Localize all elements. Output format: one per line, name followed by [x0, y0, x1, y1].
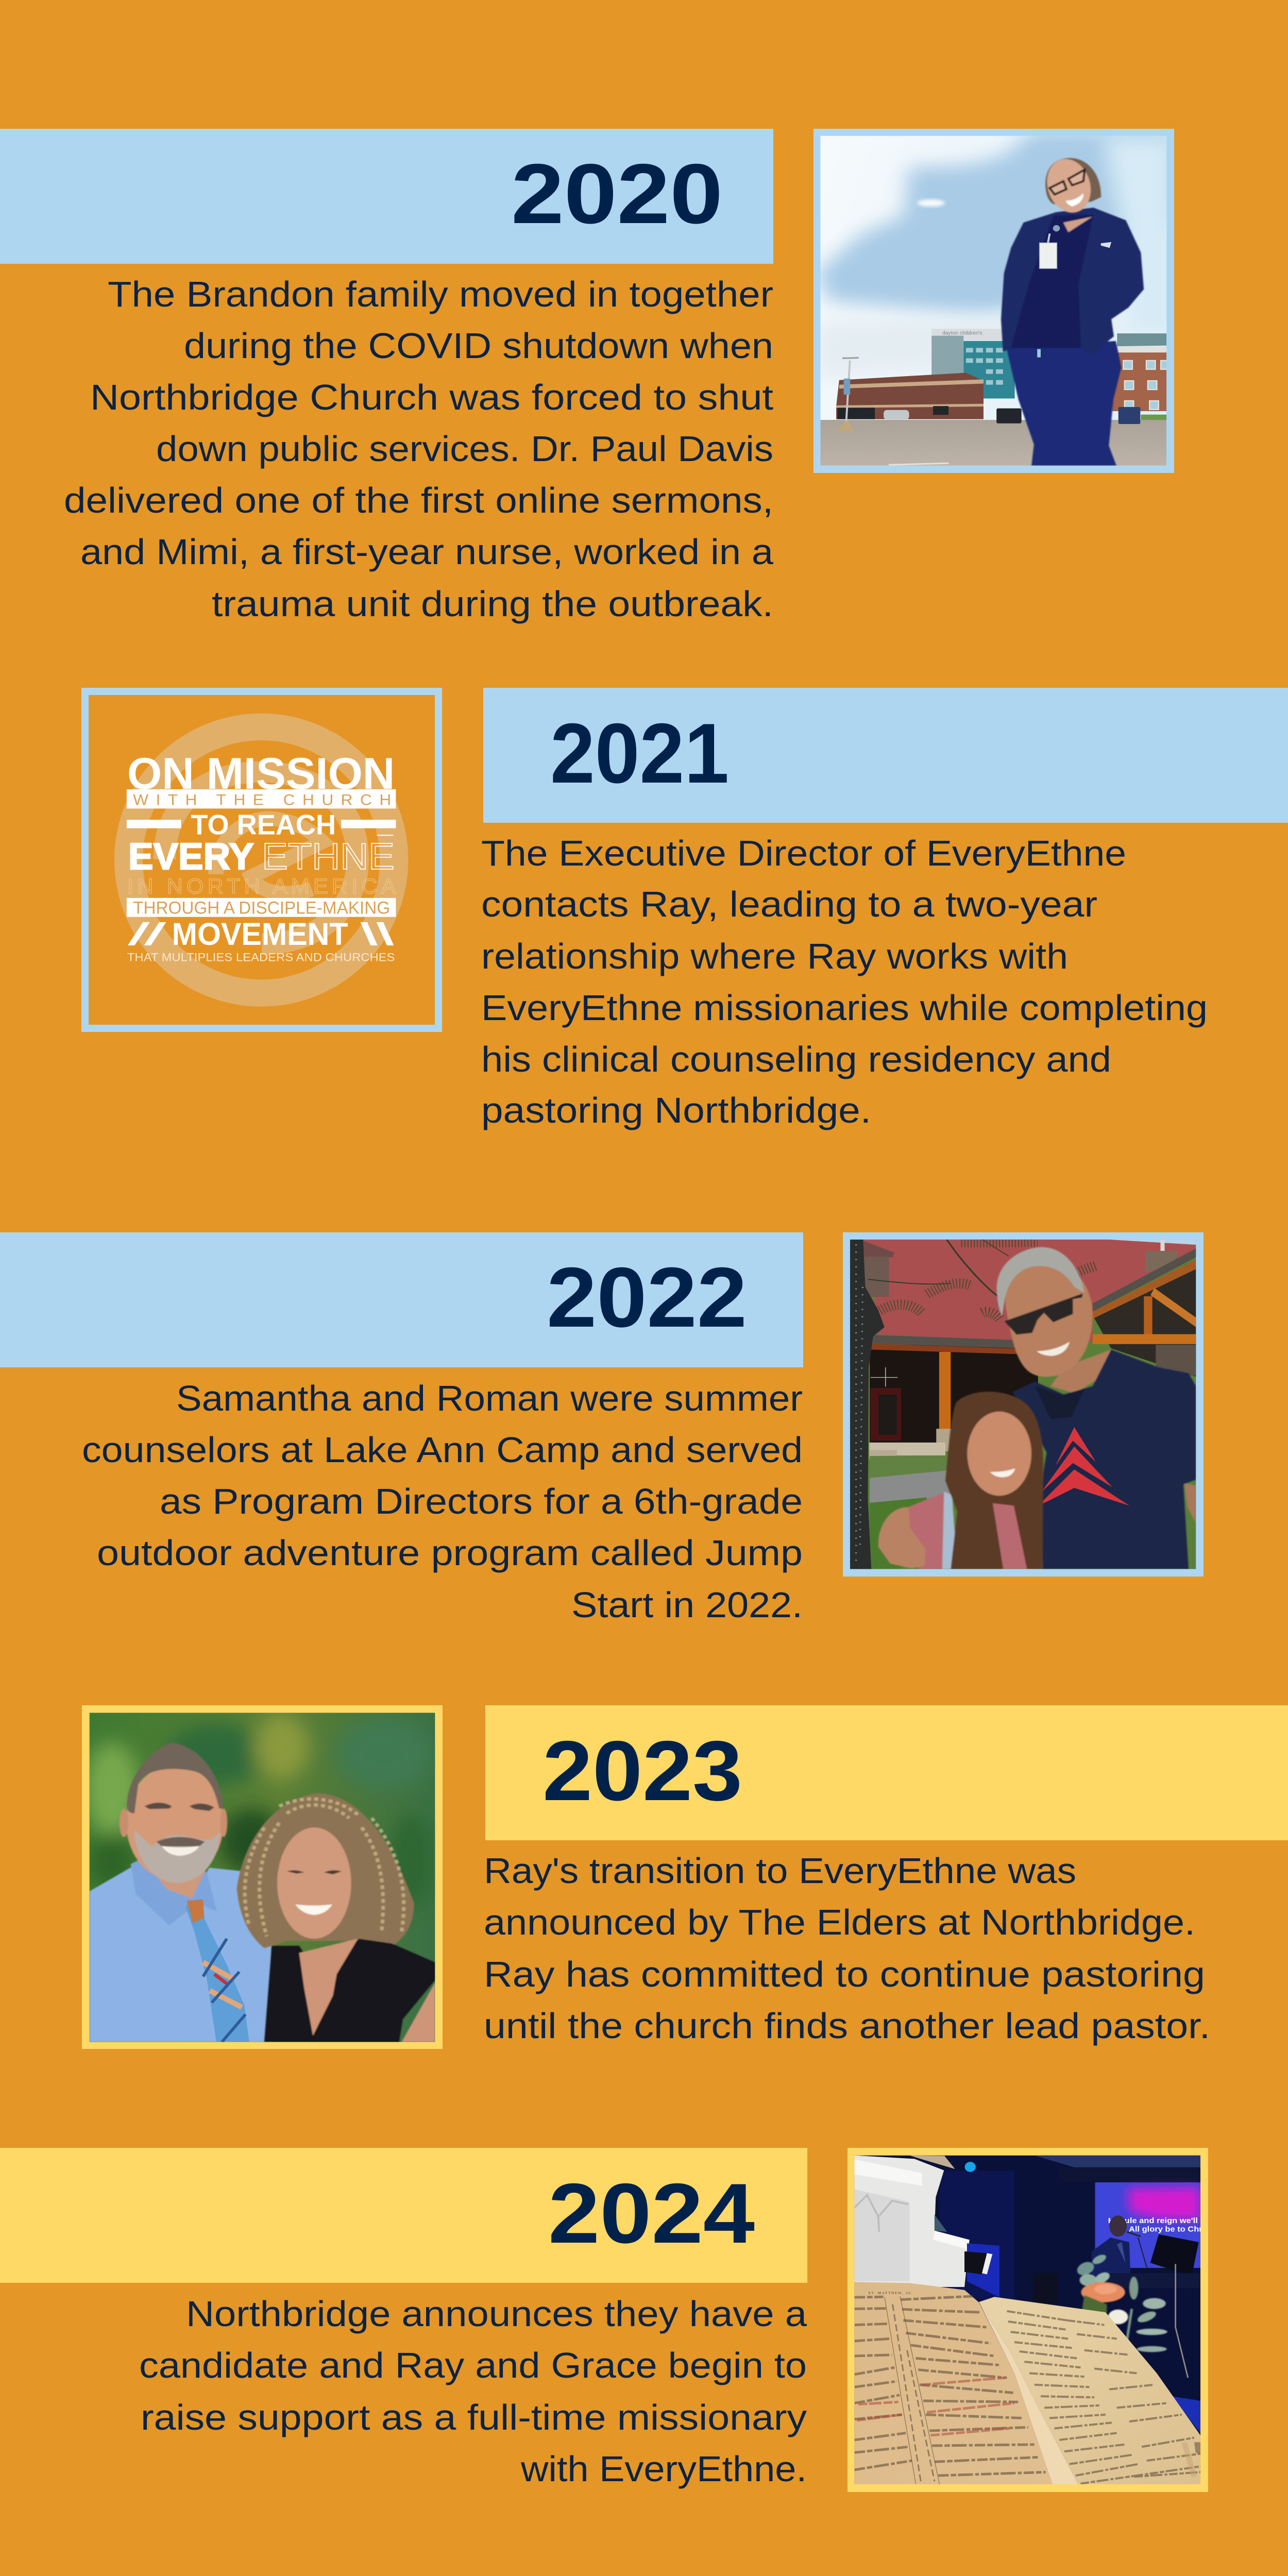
tower	[931, 329, 1007, 341]
logo text: IN NORTH AMERICA	[127, 874, 396, 898]
year band 2024: 2024	[548, 2166, 755, 2261]
text block 2020	[64, 274, 773, 624]
lamp & signs	[846, 361, 850, 422]
text block 2024: Northbridge announces they have a	[186, 2294, 807, 2334]
text block 2023: Ray's transition to EveryEthne was	[484, 1851, 1076, 1891]
panel: 2022	[0, 1232, 1204, 1625]
Bible: left page	[854, 2282, 1053, 2484]
low brick building	[836, 372, 984, 419]
panel: 2023	[82, 1705, 1288, 2049]
text block 2020: trauma unit during the outbreak.	[212, 584, 773, 624]
logo text: TO REACH	[191, 809, 336, 840]
ground	[820, 420, 1166, 466]
pine branches	[868, 1240, 1096, 1320]
text block 2021: pastoring Northbridge.	[481, 1090, 871, 1130]
logo text: ETHNE	[262, 835, 395, 877]
text block 2021: contacts Ray, leading to a two-year	[481, 884, 1097, 924]
photo: man and girl at camp	[843, 1232, 1204, 1577]
photo: open Bible in church: All glory be to Christ	[1129, 2225, 1213, 2233]
text block 2022: counselors at Lake Ann Camp and served	[82, 1430, 803, 1470]
year band 2024	[0, 2148, 807, 2283]
logo: On Mission statement	[81, 688, 442, 1032]
photo: open Bible in church	[848, 2148, 1217, 2492]
trunk	[850, 1240, 885, 1569]
year band 2021: 2021	[550, 706, 729, 801]
logo ring watermark	[128, 727, 394, 993]
right brick building	[1117, 333, 1166, 346]
text block 2024: with EveryEthne.	[520, 2449, 807, 2489]
text block 2021: relationship where Ray works with	[481, 936, 1068, 976]
text block 2020: delivered one of the first online sermons,	[64, 480, 773, 520]
year band 2023: 2023	[543, 1723, 742, 1818]
singer	[1092, 2238, 1130, 2279]
year band 2022	[0, 1232, 803, 1367]
text block 2022: as Program Directors for a 6th-grade	[160, 1481, 803, 1521]
gable right	[1093, 1267, 1196, 1377]
text block 2020: and Mimi, a first-year nurse, worked in a	[80, 532, 773, 572]
building front	[870, 1345, 1038, 1444]
logo text: THAT MULTIPLIES LEADERS AND CHURCHES	[127, 951, 395, 963]
panel: 2024	[0, 2148, 1217, 2492]
logo text: WITH THE CHURCH	[133, 791, 391, 808]
woman	[1001, 155, 1144, 466]
photo: open Bible in church: He rule and reign we'll ever	[1108, 2216, 1217, 2225]
text block 2021: The Executive Director of EveryEthne	[481, 833, 1126, 873]
text block 2021: his clinical counseling residency and	[481, 1039, 1111, 1079]
text block 2020: The Brandon family moved in together	[108, 274, 773, 314]
girl	[878, 1392, 1043, 1569]
year band 2023	[485, 1705, 1288, 1840]
tie	[185, 1899, 249, 2042]
text block 2022	[82, 1378, 803, 1625]
text block 2024: raise support as a full-time missionary	[141, 2397, 807, 2437]
text block 2021: EveryEthne missionaries while completing	[481, 988, 1208, 1028]
text block 2022: Samantha and Roman were summer	[176, 1378, 803, 1418]
flowers	[1075, 2253, 1167, 2357]
year band 2020	[0, 129, 773, 264]
fabric & stand	[967, 2243, 999, 2297]
text block 2024: candidate and Ray and Grace begin to	[139, 2345, 807, 2385]
photo: open Bible in church: ST. MATTHEW, 26.	[868, 2291, 912, 2295]
photo: Ray and Grace	[82, 1705, 443, 2049]
logo text	[127, 749, 396, 963]
text block 2020: down public services. Dr. Paul Davis	[156, 429, 773, 469]
year band 2021	[483, 688, 1288, 823]
text block 2020: Northbridge Church was forced to shut	[90, 377, 773, 417]
panel: 2020	[0, 129, 1174, 624]
woman	[237, 1793, 435, 2042]
man	[90, 1742, 272, 2042]
year band 2022: 2022	[547, 1250, 747, 1345]
logo text: EVERY	[128, 835, 254, 877]
man	[997, 1247, 1196, 1569]
text block 2021	[481, 833, 1208, 1130]
Bible: right page	[979, 2297, 1200, 2484]
text block 2023: until the church finds another lead pastor.	[484, 2006, 1210, 2046]
pulpit	[854, 2156, 970, 2287]
projection screen	[1095, 2182, 1200, 2268]
panel: 2021	[81, 688, 1288, 1130]
text block 2022: Start in 2022.	[571, 1585, 803, 1625]
text block 2023: Ray has committed to continue pastoring	[484, 1954, 1205, 1994]
text block 2023: announced by The Elders at Northbridge.	[484, 1902, 1195, 1942]
photo: nurse in front of hospital	[814, 129, 1174, 473]
logo text: MOVEMENT	[172, 917, 348, 952]
text block 2024	[139, 2294, 807, 2489]
year band 2020: 2020	[511, 146, 723, 241]
text block 2022: outdoor adventure program called Jump	[97, 1533, 803, 1573]
photo: nurse in front of hospital: dayton children's	[942, 331, 982, 336]
text block 2020: during the COVID shutdown when	[184, 326, 773, 366]
text block 2023	[484, 1851, 1210, 2046]
